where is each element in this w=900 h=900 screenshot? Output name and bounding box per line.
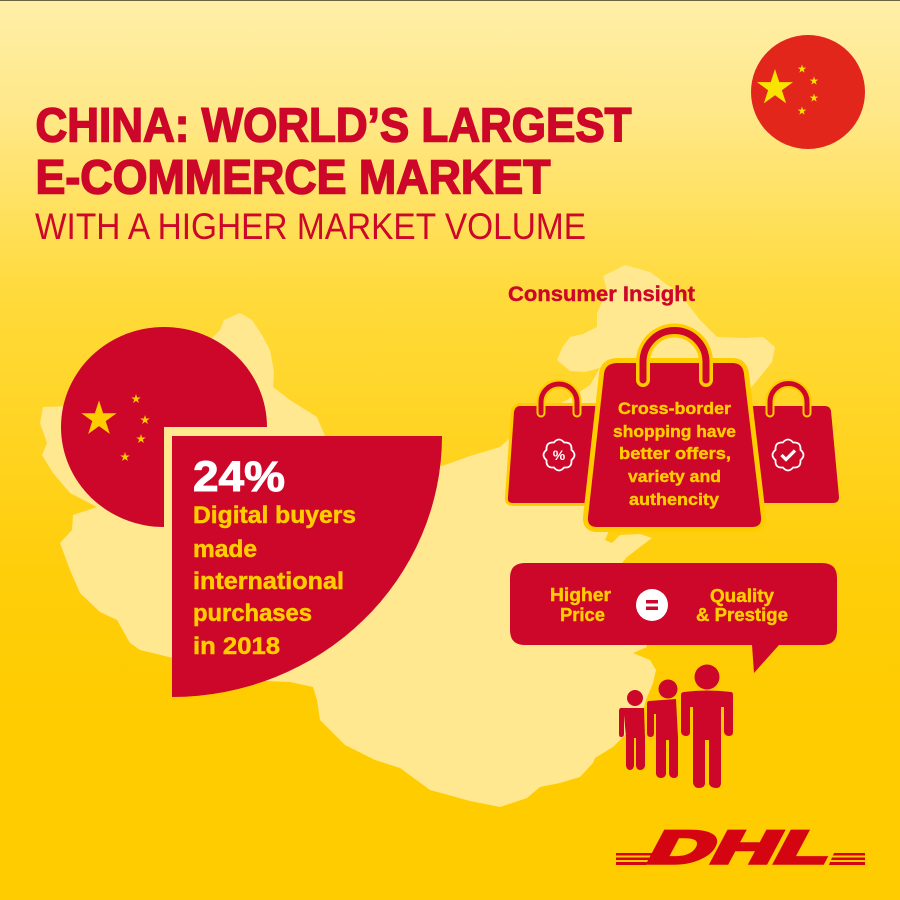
icon: left shopping bag (508, 384, 600, 503)
icon: bag handle (643, 331, 706, 380)
logo: DHL (616, 823, 865, 873)
text: digital buyers description: in 2018 (193, 633, 280, 660)
heading: consumer insight: Consumer Insight (508, 283, 695, 306)
map of China (40, 265, 775, 807)
person: small (619, 690, 645, 770)
text: cross-border shopping: shopping have (613, 422, 736, 441)
icon: percent badge: % (553, 447, 566, 463)
logo speed stripes, right (829, 853, 865, 865)
text: higher price: Price (560, 605, 605, 625)
icon: three-quarter flag circle (61, 327, 267, 527)
text: digital buyers description: purchases (193, 600, 312, 627)
icon: check badge (773, 440, 803, 470)
text: higher price (550, 585, 611, 625)
title: E-COMMERCE MARKET (36, 152, 550, 204)
title: CHINA: WORLD’S LARGEST (36, 100, 632, 152)
title (35, 100, 632, 247)
panel: 24% digital buyers (172, 436, 442, 697)
icon: equals sign (636, 589, 668, 621)
text: digital buyers description (193, 502, 356, 660)
text: quality and prestige: Quality (710, 586, 774, 606)
text: cross-border shopping: authencity (629, 490, 720, 509)
text: quality and prestige (696, 586, 788, 625)
text: cross-border shopping: Cross-border (618, 399, 731, 418)
logo wordmark: DHL (639, 823, 845, 873)
person: medium (647, 680, 678, 778)
icon: China flag circle, top right (751, 35, 865, 149)
icon: people group (619, 664, 733, 788)
person: large (681, 664, 733, 788)
text: higher price: Higher (550, 585, 611, 605)
text: cross-border shopping: variety and (628, 467, 721, 486)
panel: central shopping bag (588, 331, 761, 527)
callout: higher price equals quality and prestige (510, 563, 837, 673)
statistic: 24%: 24% (193, 453, 285, 501)
text: digital buyers description: international (193, 568, 344, 595)
logo speed stripes, left (616, 853, 652, 865)
text: cross-border shopping (613, 399, 736, 509)
text: digital buyers description: Digital buyers (193, 502, 356, 529)
text: quality and prestige: & Prestige (696, 605, 788, 625)
title: WITH A HIGHER MARKET VOLUME (35, 206, 586, 247)
text: cross-border shopping: better offers, (619, 444, 731, 463)
icon: right shopping bag (750, 384, 839, 503)
text: digital buyers description: made (193, 536, 257, 563)
